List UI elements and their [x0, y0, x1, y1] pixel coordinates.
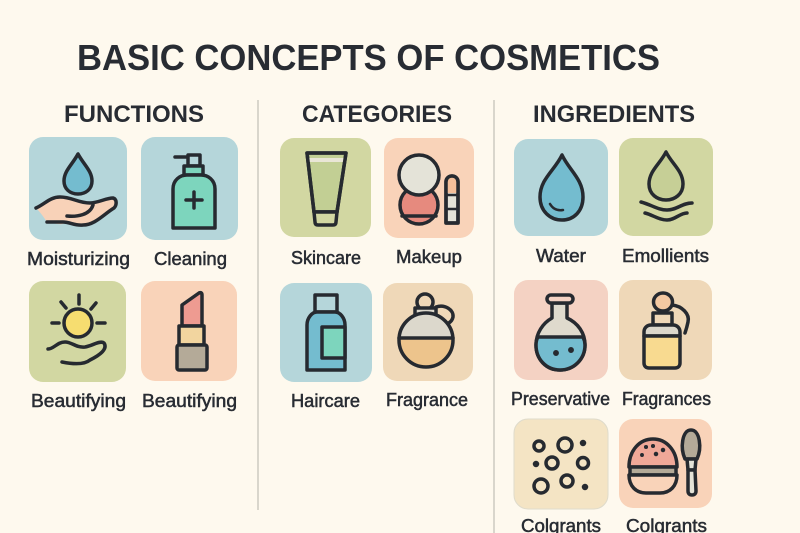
panel: fragrances — [619, 280, 712, 409]
panel: beautifying lipstick — [141, 281, 237, 411]
label: Fragrance — [386, 390, 468, 410]
panel: haircare — [280, 283, 372, 411]
label: Preservative — [511, 389, 610, 409]
panel: cleaning — [141, 137, 238, 269]
panel: colorants particles — [514, 419, 608, 533]
title: BASIC CONCEPTS OF COSMETICS — [77, 37, 660, 78]
label: Haircare — [291, 391, 360, 411]
panel: preservative — [511, 280, 610, 409]
icon: lipstick — [177, 293, 207, 370]
label: Beautifying — [142, 391, 237, 411]
icon: water drop — [540, 155, 583, 220]
panel: colorants powder — [619, 419, 712, 533]
panel: beautifying sun — [29, 281, 126, 411]
icon: sun and hand — [48, 295, 105, 364]
label: Skincare — [291, 248, 361, 268]
icon: compact and stick — [399, 155, 458, 224]
icon: round perfume bottle — [399, 294, 453, 367]
label: Emollients — [622, 246, 709, 266]
icon: shampoo bottle — [307, 295, 345, 370]
panel: emollients — [619, 138, 713, 266]
label: Water — [536, 246, 586, 266]
panel: makeup — [384, 138, 474, 267]
panel: moisturizing — [27, 137, 130, 269]
heading: categories: CATEGORIES — [302, 101, 452, 128]
heading: ingredients: INGREDIENTS — [533, 101, 695, 128]
icon: water drop over hand — [36, 154, 116, 225]
label: Fragrances — [622, 389, 711, 409]
icon: perfume bottle with atomizer — [644, 293, 688, 368]
label: Moisturizing — [27, 249, 130, 269]
icon: drop with waves — [641, 152, 692, 220]
icon: powder and brush — [629, 430, 700, 495]
label: Cleaning — [154, 249, 227, 269]
icon: tube — [307, 153, 346, 225]
icon: flask — [536, 295, 585, 370]
label: Makeup — [396, 247, 462, 267]
panel: skincare — [280, 138, 371, 268]
icon: pump bottle — [173, 155, 215, 228]
panel: water — [514, 139, 608, 266]
label: Beautifying — [31, 391, 126, 411]
icon: pigment particles — [534, 438, 588, 493]
panel: fragrance — [383, 283, 473, 410]
heading: functions: FUNCTIONS — [64, 101, 204, 128]
